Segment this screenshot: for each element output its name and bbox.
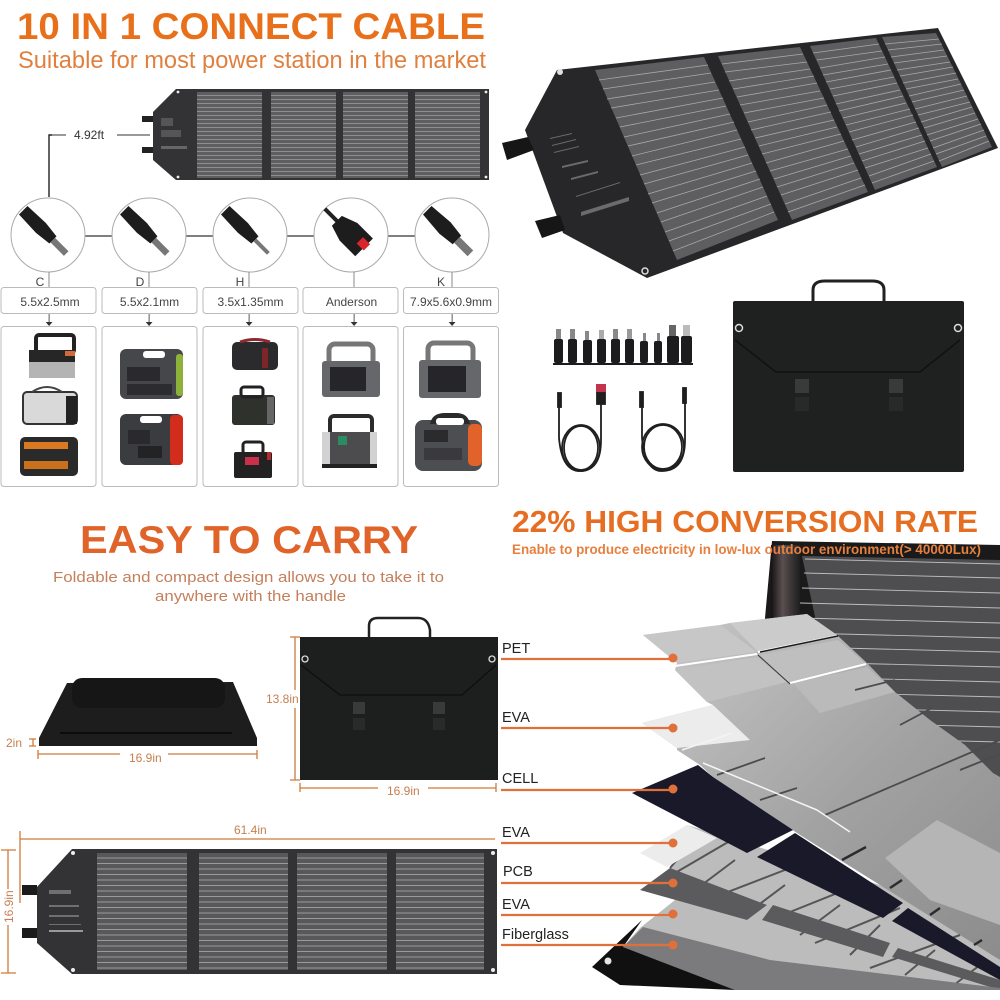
layer label PET: [501, 641, 678, 662]
title: easy to carry: EASY TO CARRY: [80, 519, 418, 562]
size label H: 3.5x1.35mm: [217, 295, 284, 309]
connector K: [415, 198, 489, 289]
carry description text: anywhere with the handle: [155, 588, 346, 605]
size label K: [404, 288, 498, 314]
layer label EVA: EVA: [502, 825, 530, 841]
layer label EVA: [501, 710, 678, 732]
layer label Fiberglass: [501, 927, 678, 950]
size label C: [1, 288, 96, 314]
layer label PET: PET: [502, 641, 530, 657]
cable length label: [49, 128, 150, 197]
size label Anderson: Anderson: [326, 295, 377, 309]
layer label PCB: PCB: [503, 864, 533, 880]
layer stack grey mass: [642, 614, 1000, 960]
size label K: 7.9x5.6x0.9mm: [410, 295, 492, 309]
arrows from size labels to device boxes: [46, 314, 455, 326]
dimension: open width: 61.4in: [234, 823, 267, 837]
device box Anderson: [303, 326, 398, 486]
carry description text: [53, 569, 444, 605]
connector C: [11, 198, 85, 289]
layer label EVA: EVA: [502, 710, 530, 726]
cable length label: 4.92ft: [74, 128, 105, 142]
layer label PCB: [501, 864, 678, 888]
panel cell 1: [595, 57, 778, 260]
dimension: open height: [1, 850, 16, 973]
layer label Fiberglass: Fiberglass: [502, 927, 569, 943]
dimension: open width: [20, 823, 495, 903]
panel connectors: [502, 137, 534, 160]
size label Anderson: [303, 288, 398, 314]
title: 22% high conversion rate: 22% HIGH CONVERSION RATE: [512, 504, 978, 539]
connector Anderson: [314, 198, 388, 287]
title: 10 in 1 connect cable: 10 IN 1 CONNECT CABLE: [17, 6, 485, 47]
panel certification marks: [550, 133, 629, 216]
device box D: [102, 326, 197, 486]
subtitle: cable: Suitable for most power station in the market: [18, 47, 486, 74]
dimension: bag width: 16.9in: [387, 784, 420, 798]
stack gap marks: [842, 847, 982, 945]
dimension: stack height and width: 2in: [6, 736, 22, 750]
exploded layers illustration: [592, 541, 1000, 990]
layer label EVA: [501, 825, 678, 848]
device box K: [404, 326, 498, 486]
gap lines across grey mass: [717, 680, 1000, 815]
dimension: open height: 16.9in: [2, 890, 16, 923]
folded stack: [39, 678, 257, 746]
lower pale tile: [885, 820, 1000, 925]
dimension: stack height and width: [6, 736, 257, 765]
DC cable coil: [640, 388, 686, 471]
connector H: H: [236, 275, 244, 289]
EVA light tile: [642, 705, 750, 748]
subtitle: low-lux: Enable to produce electricity in low-lux outdoor environment(> 40000Lux): [512, 542, 981, 557]
size label C: 5.5x2.5mm: [20, 295, 80, 309]
connector D: [112, 198, 186, 289]
panel cell 4: [882, 33, 992, 167]
dimension: bag width: [300, 783, 496, 798]
layer label CELL: [501, 771, 678, 794]
fiberglass strip: [623, 927, 1000, 990]
open flat solar panel: [22, 849, 497, 974]
adapter tips set: [553, 325, 693, 365]
layer label EVA: [501, 897, 678, 918]
device box H: [203, 326, 298, 486]
size label H: [203, 288, 298, 314]
layer label CELL: CELL: [502, 771, 538, 787]
connector C: C: [36, 275, 45, 289]
dimension: stack height and width: 16.9in: [129, 751, 162, 765]
connector H: [213, 198, 287, 289]
connector row line: [85, 235, 416, 237]
folded carry bag top: [733, 281, 964, 472]
device box C: [1, 326, 96, 486]
Anderson cable coil: [558, 384, 606, 471]
backing panel: [763, 541, 1000, 800]
large angled solar panel: [502, 28, 998, 278]
lower EVA tile: [640, 825, 717, 867]
panel cell 3: [810, 38, 937, 190]
black bottom corner: [592, 920, 735, 990]
size label D: 5.5x2.1mm: [120, 295, 179, 309]
PCB strips: [640, 868, 1000, 990]
lower tile layer: [623, 825, 1000, 990]
PET tiles: [643, 614, 895, 713]
CELL dark strips: [632, 765, 1000, 980]
carry description text: Foldable and compact design allows you to take it to: [53, 569, 444, 586]
connector K: K: [437, 275, 445, 289]
connector D: D: [136, 275, 145, 289]
small solar panel with cable: [142, 89, 489, 180]
panel cell 2: [718, 47, 868, 220]
dimension: bag height: 13.8in: [266, 692, 299, 706]
carry bag with dimensions: [300, 618, 498, 780]
layer label EVA: EVA: [502, 897, 530, 913]
size label D: [102, 288, 197, 314]
dimension: bag height: [266, 637, 300, 780]
